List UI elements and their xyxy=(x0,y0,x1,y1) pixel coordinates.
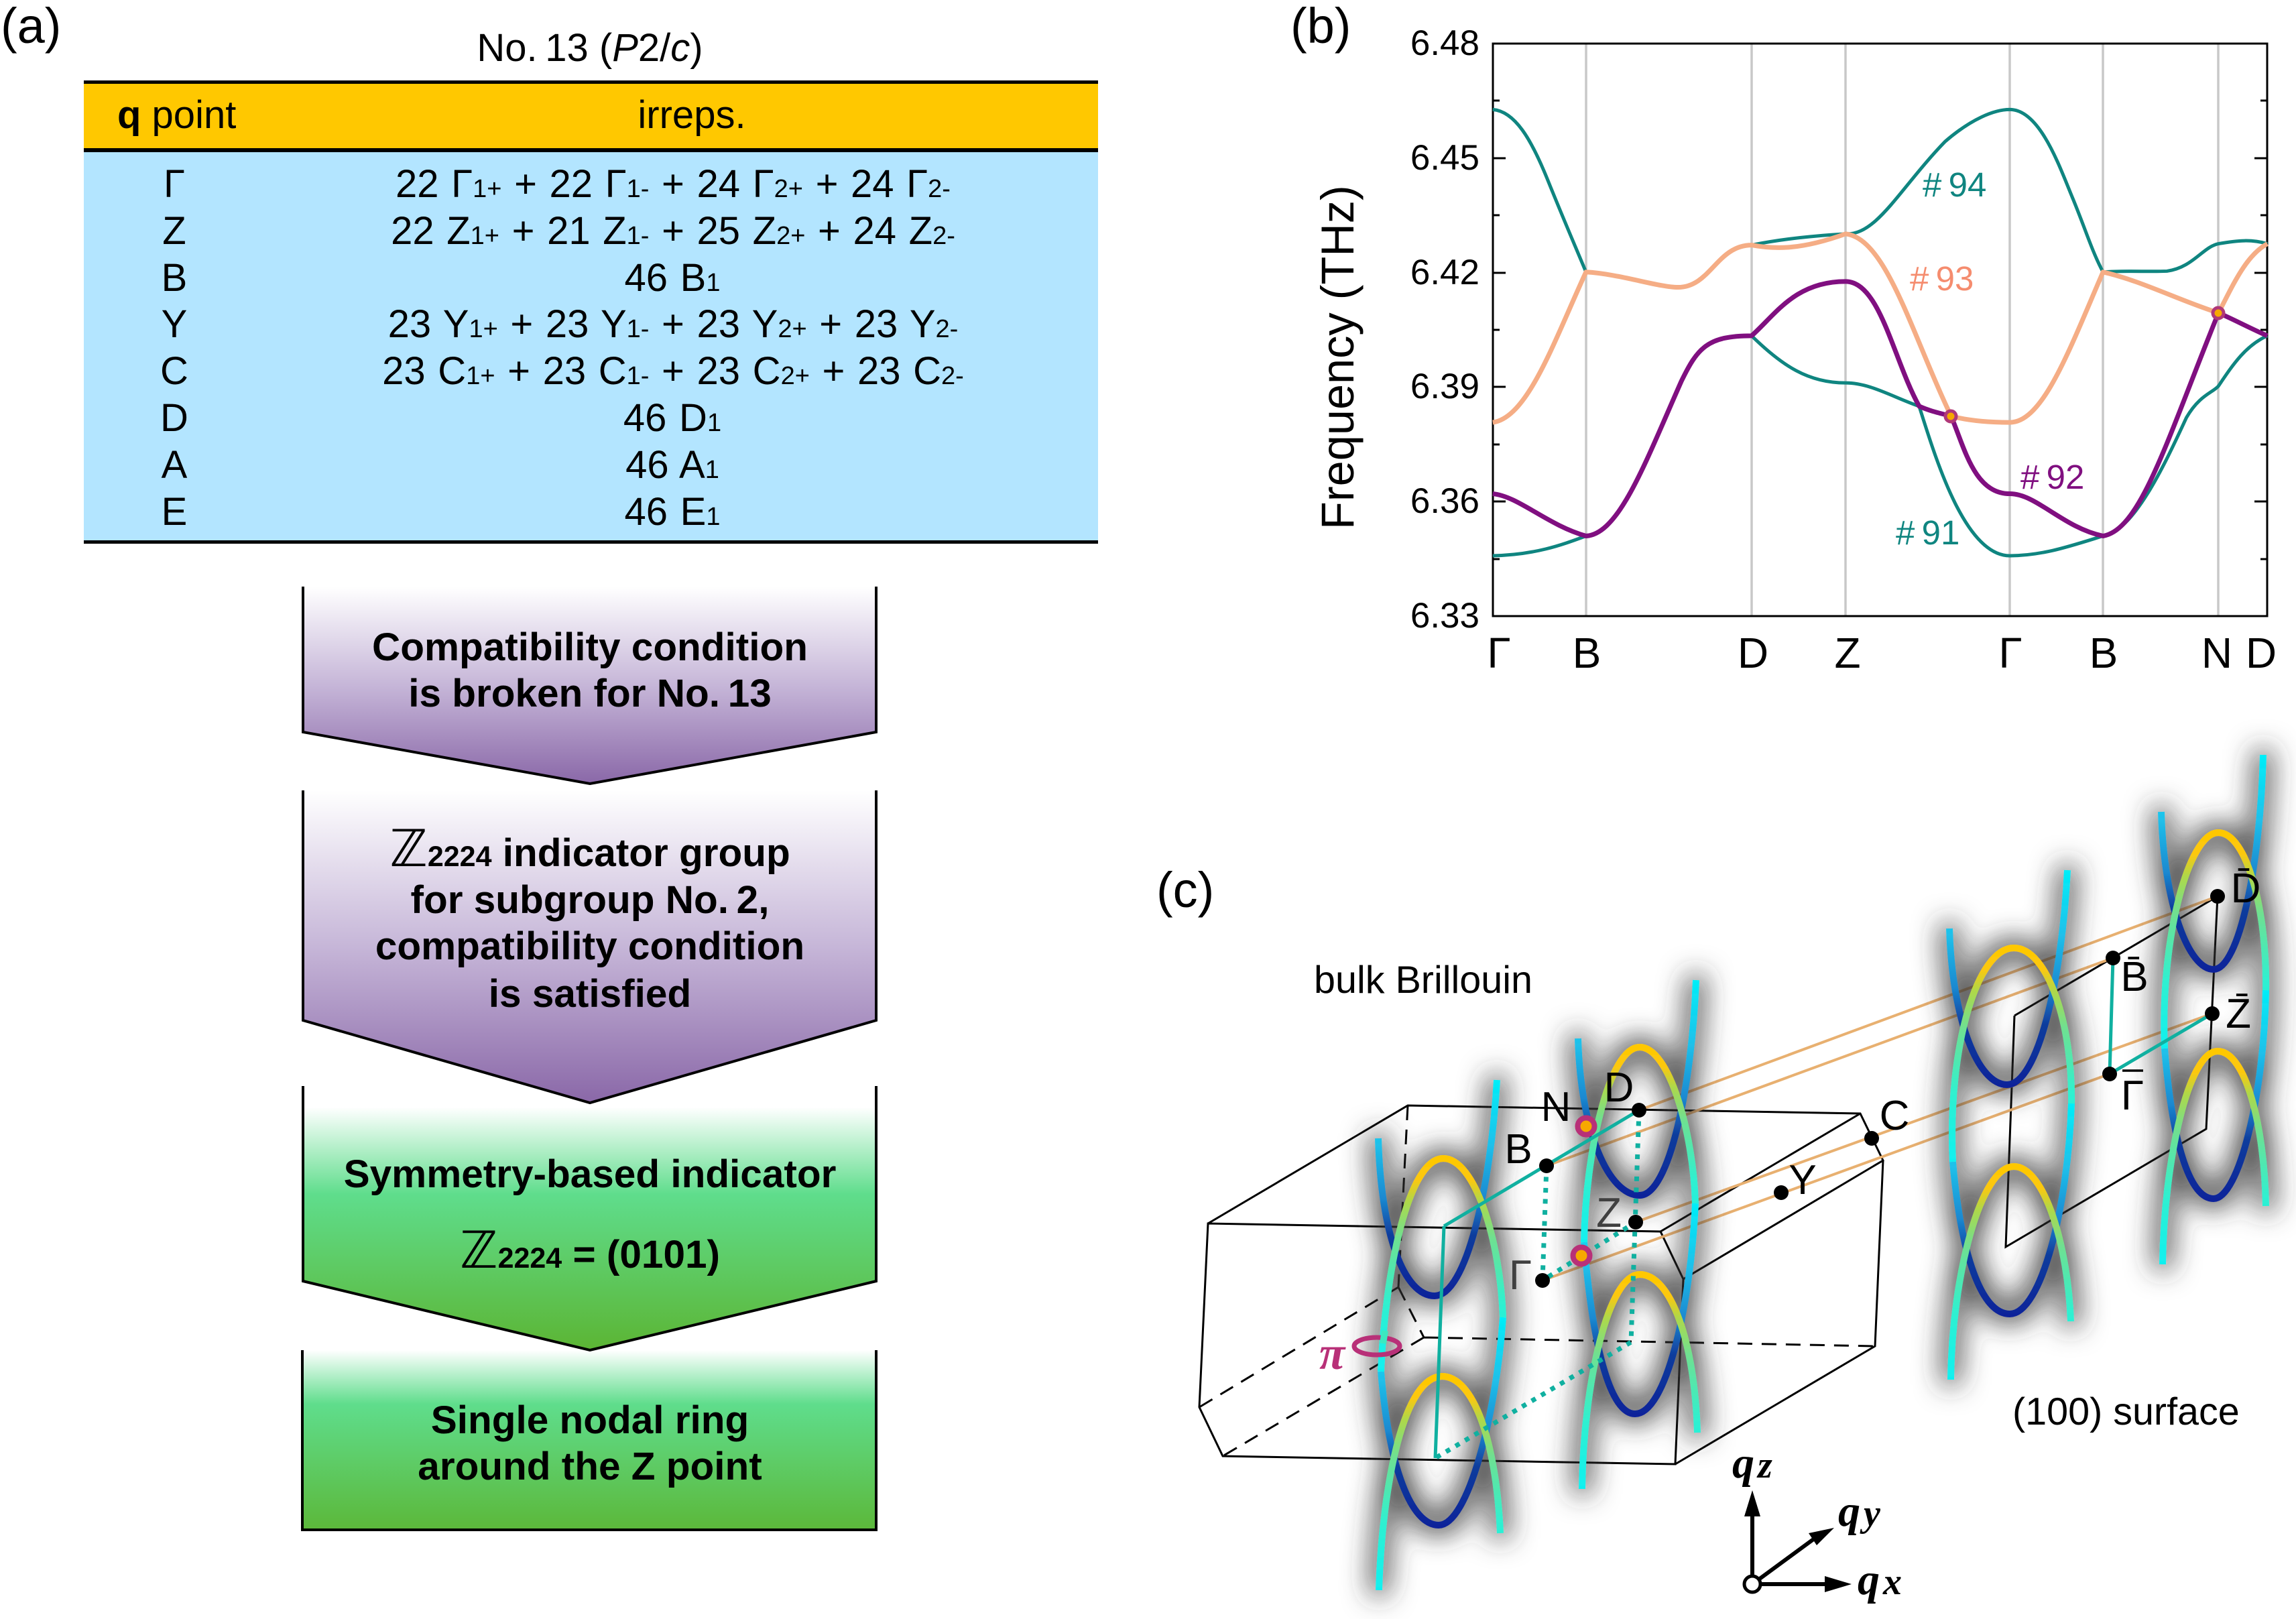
point labels: B xyxy=(1504,1126,1532,1173)
band labels: # 93 xyxy=(1910,259,1974,298)
panel: phonon band chart xyxy=(1312,23,2277,677)
surface zone outline xyxy=(2006,896,2218,1247)
flow box 4: single nodal ring: around the Z point xyxy=(418,1445,762,1488)
flow box 2: indicator group: for subgroup No. 2, xyxy=(411,878,769,922)
point labels: Γ xyxy=(2121,1073,2144,1119)
pi Berry phase ring: π xyxy=(1319,1328,1346,1380)
x tick labels: Γ xyxy=(1487,629,1511,677)
flow box 3: symmetry-based indicator xyxy=(303,1086,876,1350)
band labels: # 94 xyxy=(1923,166,1986,204)
table header: irreps. xyxy=(638,93,746,137)
flow box 3: symmetry-based indicator: ℤ2224 = (0101) xyxy=(460,1220,720,1280)
orange projection lines to surface xyxy=(1543,896,2218,1280)
nodal rings: bulk right xyxy=(1578,980,1697,1489)
high-symmetry points xyxy=(1535,889,2225,1288)
coordinate axes: qz xyxy=(1732,1439,1776,1488)
flow box 2: indicator group xyxy=(303,790,876,1103)
y tick labels: 6.39 xyxy=(1410,367,1479,406)
table header xyxy=(84,82,1098,150)
table header: q point xyxy=(117,93,236,137)
table body: C xyxy=(160,349,188,393)
flow box 2: indicator group: is satisfied xyxy=(489,972,691,1016)
flow box 1: compatibility broken: Compatibility condition xyxy=(372,625,808,669)
point labels: Y xyxy=(1789,1157,1817,1203)
panel label (c): (c) xyxy=(1156,862,1214,918)
flow box 2: indicator group: ℤ2224 indicator group xyxy=(389,819,790,878)
table body: B xyxy=(162,256,187,300)
table body: 22 Γ1+ + 22 Γ1- + 24 Γ2+ + 24 Γ2- xyxy=(396,162,951,206)
y tick labels: 6.45 xyxy=(1410,138,1479,178)
x tick labels: B xyxy=(2090,629,2118,677)
flow box 1: compatibility broken xyxy=(303,587,876,784)
bands drawn in a scaled coordinate group xyxy=(1493,109,2267,556)
x tick labels: B xyxy=(1573,629,1601,677)
table body: E xyxy=(162,490,187,534)
gamma-bar overline xyxy=(2122,1069,2143,1072)
table body: 46 D1 xyxy=(623,396,721,440)
x tick labels: Z xyxy=(1834,629,1861,677)
table body: D xyxy=(160,396,188,440)
table title: No. 13 (P2/c) xyxy=(477,26,703,70)
table body: Z xyxy=(162,209,186,253)
y tick labels xyxy=(1410,23,1479,636)
node markers xyxy=(1945,308,2224,422)
panel: irreps table xyxy=(84,80,1098,544)
flow box 2: indicator group: compatibility condition xyxy=(375,924,804,968)
y tick labels: 6.36 xyxy=(1410,481,1479,521)
table body xyxy=(84,80,1098,544)
flow box 4: single nodal ring: Single nodal ring xyxy=(431,1398,749,1442)
x tick labels: Γ xyxy=(1998,629,2022,677)
bulk Brillouin zone box xyxy=(1199,1105,1883,1464)
point labels: N xyxy=(1541,1084,1571,1130)
point labels: Γ xyxy=(1509,1252,1532,1299)
table body: 46 B1 xyxy=(625,256,720,300)
band 92 xyxy=(1493,282,2267,536)
panel: Brillouin zone diagram xyxy=(1199,755,2266,1604)
band 94 xyxy=(1493,109,2267,272)
flow box 1: compatibility broken: is broken for No. 13 xyxy=(408,672,772,715)
point labels: D xyxy=(1604,1065,1634,1111)
band labels: # 91 xyxy=(1896,514,1959,552)
point labels: Z̄ xyxy=(2226,991,2251,1037)
flow box 4: single nodal ring xyxy=(302,1350,876,1530)
point labels: B̄ xyxy=(2120,954,2149,1000)
band 91 xyxy=(1493,336,2267,556)
coordinate axes: qx xyxy=(1858,1555,1905,1604)
point labels: D̄ xyxy=(2231,865,2260,912)
flow box 3: symmetry-based indicator: Symmetry-based indicator xyxy=(344,1152,836,1196)
y tick labels: 6.48 xyxy=(1410,23,1479,63)
table body: 23 Y1+ + 23 Y1- + 23 Y2+ + 23 Y2- xyxy=(388,302,958,346)
band 93 xyxy=(1493,234,2267,422)
table body: A xyxy=(162,443,188,487)
table body: 23 C1+ + 23 C1- + 23 C2+ + 23 C2- xyxy=(382,349,964,393)
pi Berry phase ring xyxy=(1319,1328,1400,1380)
table body: 46 A1 xyxy=(625,443,719,487)
bulk label: bulk Brillouin xyxy=(1314,959,1532,1002)
coordinate axes: qy xyxy=(1838,1487,1884,1536)
table body: 46 E1 xyxy=(625,490,720,534)
x tick labels xyxy=(1487,629,2277,677)
band labels xyxy=(1896,166,2084,552)
high-symmetry teal paths xyxy=(1435,958,2212,1458)
point labels: C xyxy=(1880,1093,1909,1139)
y tick labels: 6.42 xyxy=(1410,253,1479,292)
nodal rings: bulk left xyxy=(1378,1080,1503,1590)
y tick labels: 6.33 xyxy=(1410,596,1479,636)
surface label: (100) surface xyxy=(2012,1390,2240,1433)
nodal points xyxy=(1573,1118,1594,1264)
x tick labels: D xyxy=(2246,629,2277,677)
nodal rings: surface left xyxy=(1949,870,2071,1380)
band labels: # 92 xyxy=(2020,458,2084,496)
x tick labels: D xyxy=(1738,629,1768,677)
x tick labels: N xyxy=(2201,629,2232,677)
table body: Γ xyxy=(164,162,185,206)
point labels xyxy=(1504,865,2260,1299)
nodal rings: surface right xyxy=(2161,755,2266,1264)
y axis title: Frequency (THz) xyxy=(1312,185,1364,530)
coordinate axes xyxy=(1732,1439,1905,1604)
point labels: Z xyxy=(1596,1190,1622,1236)
table body: Y xyxy=(162,302,187,346)
table body: 22 Z1+ + 21 Z1- + 25 Z2+ + 24 Z2- xyxy=(391,209,955,253)
